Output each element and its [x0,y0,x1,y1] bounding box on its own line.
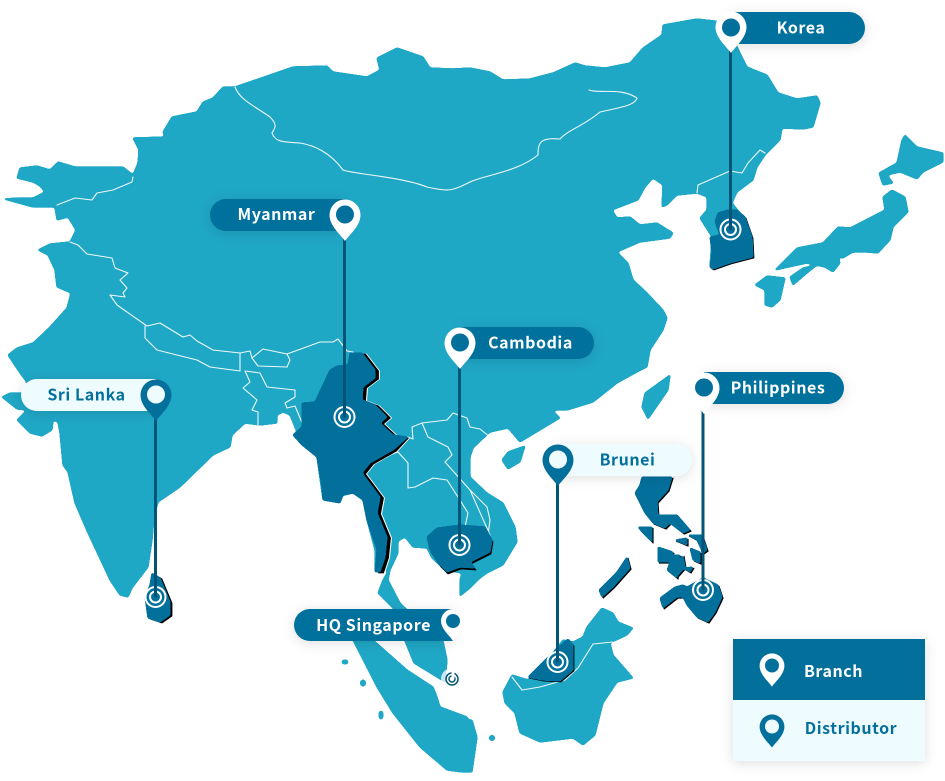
label: Sri Lanka: Sri Lanka [47,382,126,406]
Philippines connector [693,410,713,600]
pill [460,327,594,359]
pin [330,200,360,241]
label: Brunei [542,444,692,486]
Visayas [638,527,707,578]
highlighted: Sri Lanka [145,573,172,623]
mainland Asia [2,19,820,682]
Hainan [502,446,525,469]
label: Myanmar [210,199,360,241]
legend panel [733,639,925,761]
Brunei connector [548,484,568,672]
Myanmar connector [334,238,354,427]
label: Korea: Korea [777,14,825,38]
pin [444,328,476,369]
legend: Branch: Branch [804,658,863,682]
legend: Distributor [760,714,897,748]
highlighted: South Korea [710,210,754,270]
Luzon [635,477,672,523]
legend: Distributor: Distributor [805,715,897,739]
highlighted: Myanmar [293,353,410,573]
pill [704,372,844,404]
label: Myanmar: Myanmar [238,201,315,225]
pill [294,609,453,641]
highlighted: Philippines [599,477,723,623]
Taiwan [642,375,670,419]
pin [140,380,172,421]
Kyushu [755,276,785,307]
Sumatra [353,640,477,772]
connector lines and target rings [146,50,740,690]
Sumatra islands [342,660,494,740]
pin [716,12,746,53]
label: Philippines: Philippines [731,374,825,398]
pill [210,199,345,231]
pill [21,379,156,411]
label: Korea [716,12,865,53]
Shikoku [790,265,817,285]
highlighted: Cambodia [427,525,493,574]
pin [542,444,574,486]
Palawan [599,557,630,597]
legend [733,639,925,761]
Sri Lanka connector [146,418,166,607]
pill [731,12,865,44]
label: Brunei: Brunei [600,446,655,470]
country borders [57,87,765,690]
highlighted: Brunei [528,639,574,682]
label: Philippines [688,372,844,414]
HQ Singapore connector [441,638,463,690]
Mindanao [660,578,722,622]
label: HQ Singapore [294,609,465,641]
pin [688,372,720,414]
Honshu [775,190,908,272]
label: HQ Singapore: HQ Singapore [316,612,431,636]
legend: Branch [733,639,925,700]
Cambodia connector [450,367,470,555]
Korea connector [720,50,740,240]
pill [558,444,692,476]
label: Cambodia [444,327,594,369]
label: Sri Lanka [21,379,172,421]
Borneo [503,608,633,745]
pin [441,609,465,641]
label: Cambodia: Cambodia [488,330,573,354]
Hokkaido [879,135,943,185]
